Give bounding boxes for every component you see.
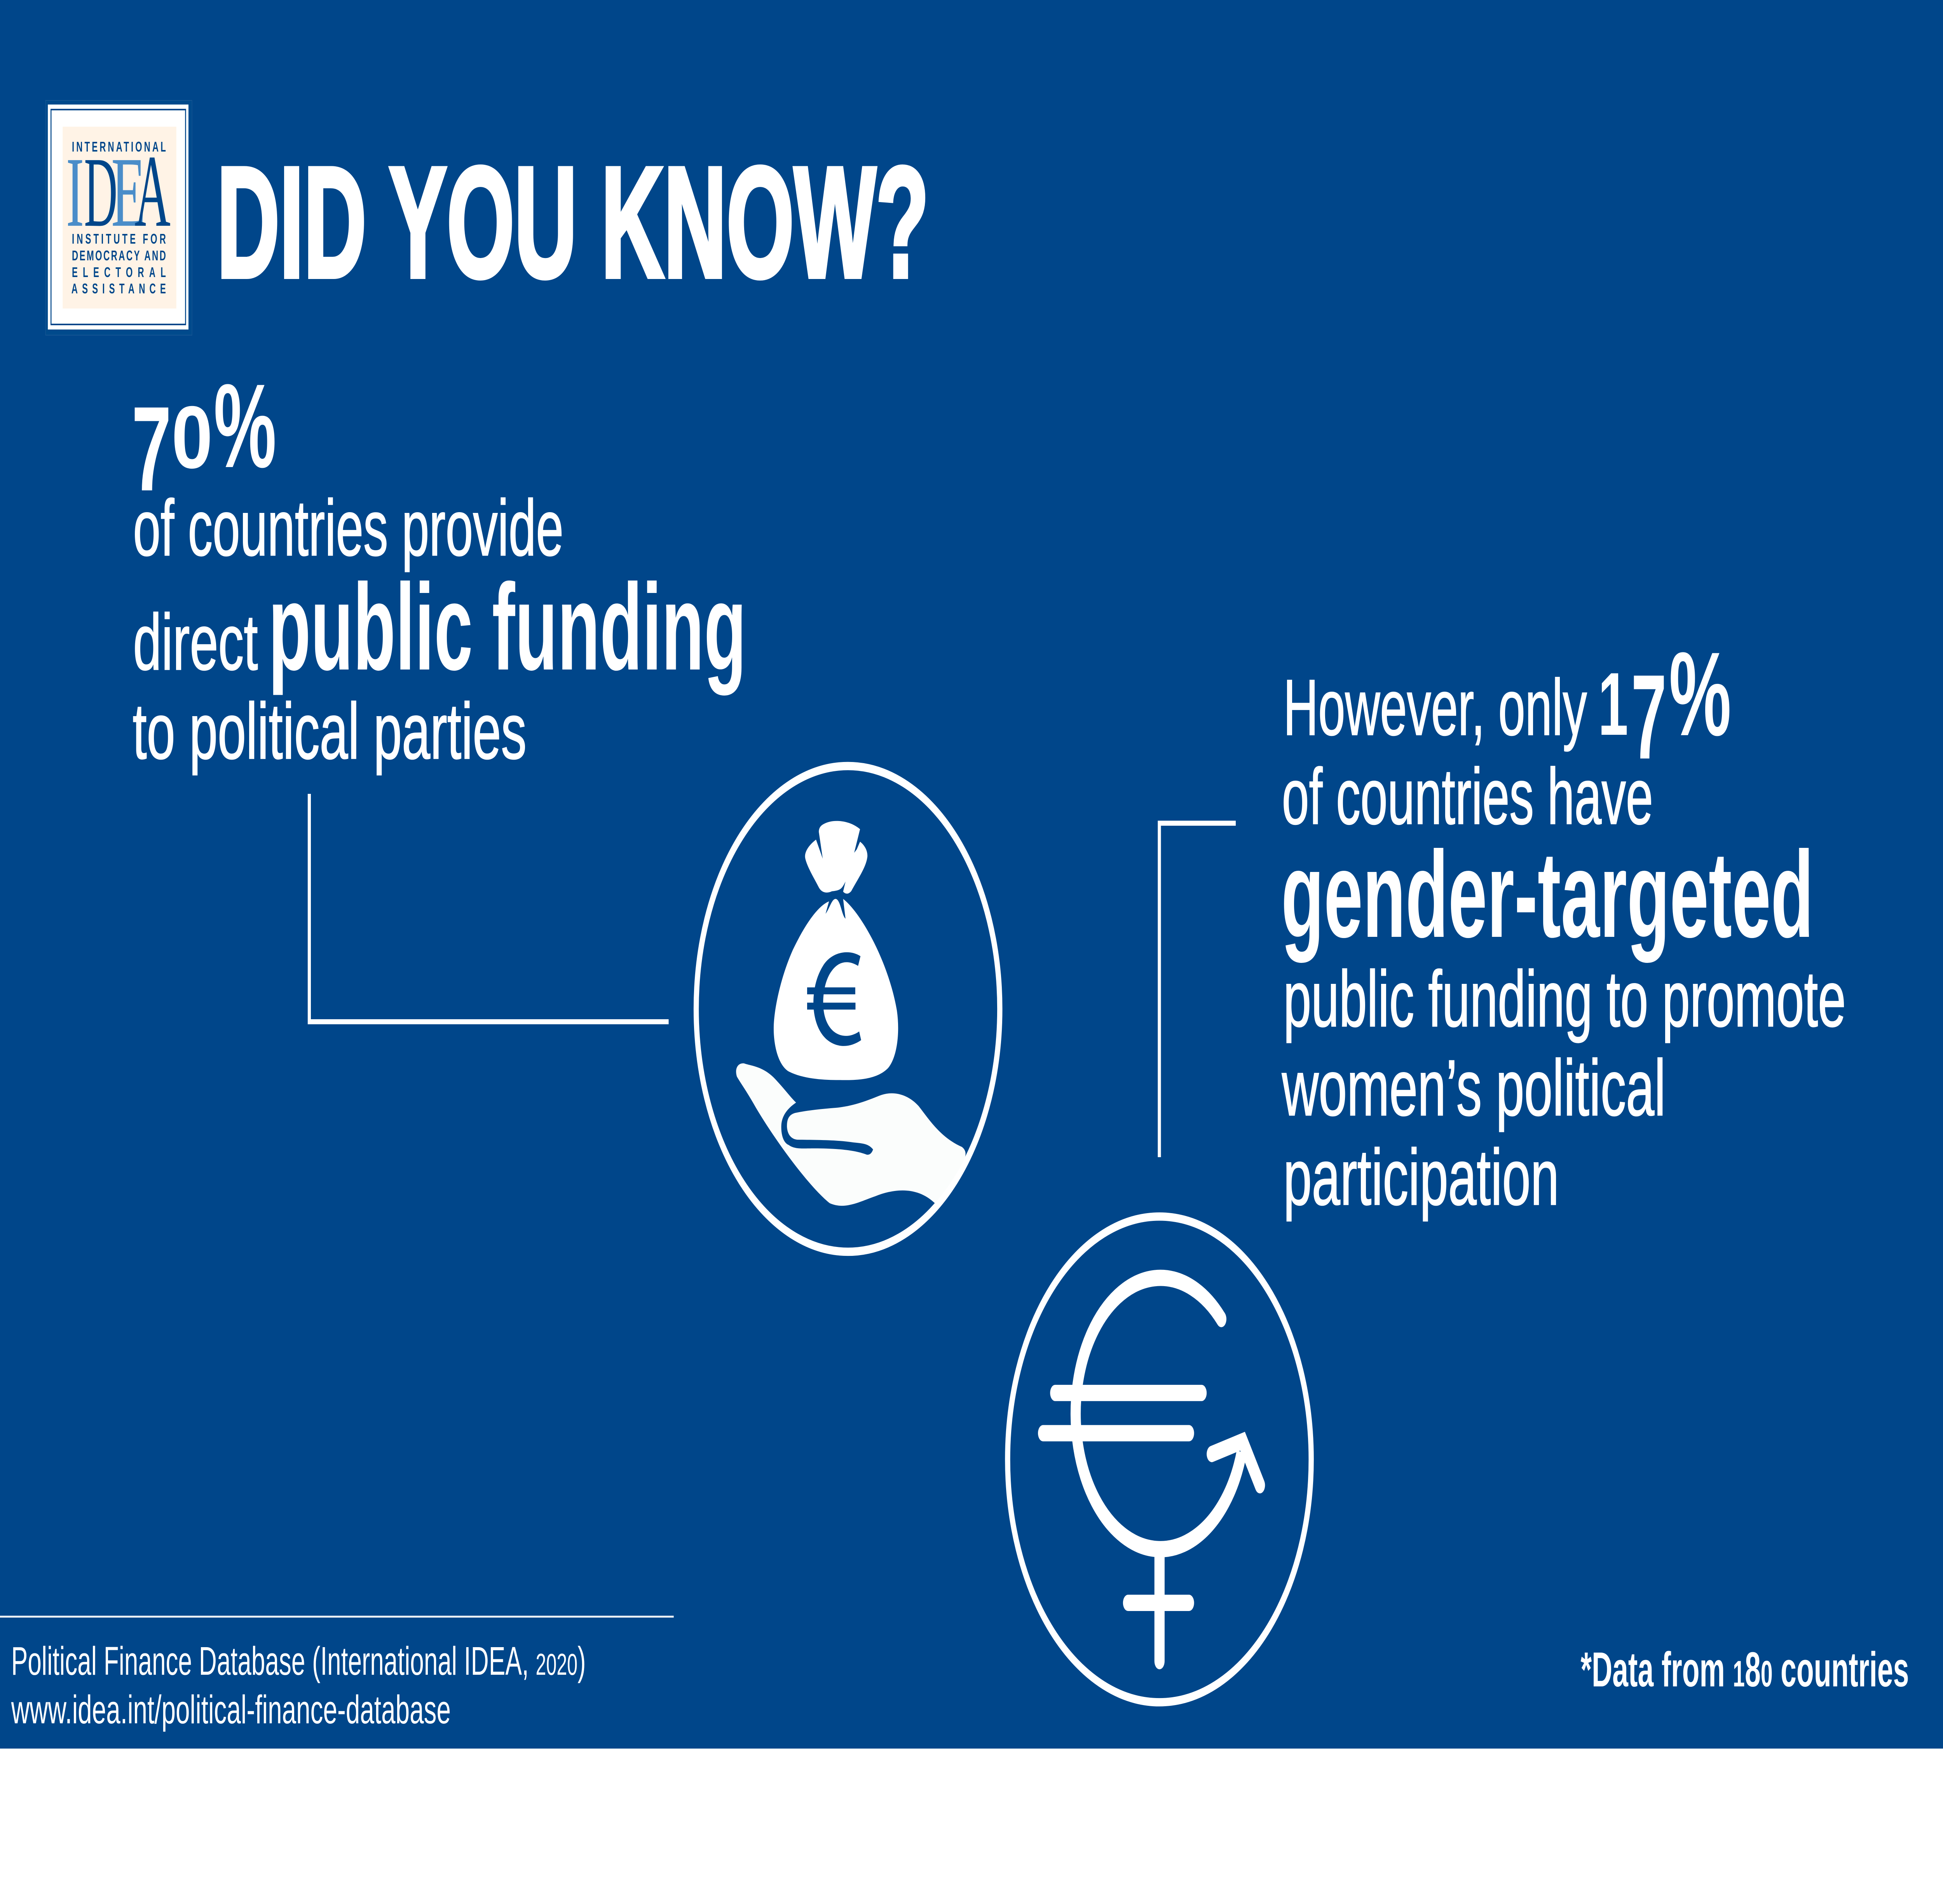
footnote: *Data from 180 countries bbox=[1581, 1642, 1909, 1697]
text block: 17 percent gender-targeted funding: participation bbox=[1283, 1133, 1559, 1222]
statistic: 17%: 1 bbox=[1598, 654, 1628, 754]
rising arrow bbox=[1212, 1441, 1260, 1485]
statistic: 70%: 0 bbox=[171, 388, 213, 487]
logo: International IDEA: DEMOCRACY AND bbox=[72, 248, 166, 263]
text block: 70 percent public funding: of countries provide bbox=[133, 484, 563, 572]
venus cross bbox=[1128, 1553, 1189, 1661]
title: DID YOU KNOW? bbox=[217, 134, 929, 310]
text block: 17 percent gender-targeted funding: of countries have bbox=[1282, 753, 1653, 841]
logo: International IDEA: INTERNATIONAL bbox=[72, 139, 166, 155]
statistic: 70% bbox=[132, 359, 276, 516]
icon ring bbox=[1008, 1217, 1311, 1702]
euro sign bbox=[807, 952, 861, 1046]
source credit: Political Finance Database (International IDEA, 2020) bbox=[11, 1639, 586, 1684]
logo: International IDEA bbox=[45, 100, 192, 335]
logo: International IDEA: ASSISTANCE bbox=[72, 281, 166, 296]
connector arrow: public funding text to money icon bbox=[309, 794, 669, 1022]
text block: 17 percent gender-targeted funding bbox=[1281, 628, 1846, 1222]
source credit: www.idea.int/political-finance-database bbox=[11, 1688, 451, 1732]
logo: International IDEA: A bbox=[134, 134, 171, 248]
logo: International IDEA: I bbox=[66, 136, 84, 248]
text block: 70 percent public funding bbox=[132, 359, 747, 776]
statistic: 17%: 7 bbox=[1631, 649, 1667, 784]
icon ring bbox=[696, 766, 1000, 1252]
open hand bbox=[736, 1063, 966, 1206]
text block: 70 percent public funding: to political parties bbox=[133, 687, 527, 776]
text block: 17 percent gender-targeted funding: gender-targeted bbox=[1281, 825, 1814, 964]
euro and venus ring bbox=[1076, 1278, 1242, 1549]
euro bars bbox=[1043, 1393, 1202, 1433]
statistic: 17% bbox=[1598, 628, 1731, 784]
source rule bbox=[0, 1616, 674, 1618]
statistic: 70%: 7 bbox=[132, 381, 171, 516]
statistic: 17%: % bbox=[1669, 628, 1731, 761]
icon: female symbol with euro and rising arrow bbox=[1008, 1217, 1311, 1702]
text block: 70 percent public funding: public funding bbox=[269, 558, 747, 696]
logo: International IDEA: ELECTORAL bbox=[72, 265, 166, 280]
source credit bbox=[11, 1639, 586, 1732]
statistic: 70%: % bbox=[214, 359, 276, 493]
text block: 17 percent gender-targeted funding: public funding to promote bbox=[1283, 955, 1846, 1043]
bag knot bbox=[805, 821, 867, 894]
text block: 17 percent gender-targeted funding: women’s political bbox=[1282, 1044, 1666, 1132]
text block: 70 percent public funding: direct bbox=[133, 598, 258, 687]
bag body bbox=[774, 899, 898, 1080]
logo: International IDEA: E bbox=[111, 136, 146, 248]
logo: International IDEA: D bbox=[84, 136, 117, 248]
icon: hand holding euro money bag bbox=[696, 766, 1000, 1252]
text block: 17 percent gender-targeted funding: However, only bbox=[1283, 664, 1587, 752]
logo: International IDEA: INSTITUTE FOR bbox=[72, 232, 166, 247]
connector arrow: gender icon to gender text bbox=[1159, 823, 1236, 1157]
